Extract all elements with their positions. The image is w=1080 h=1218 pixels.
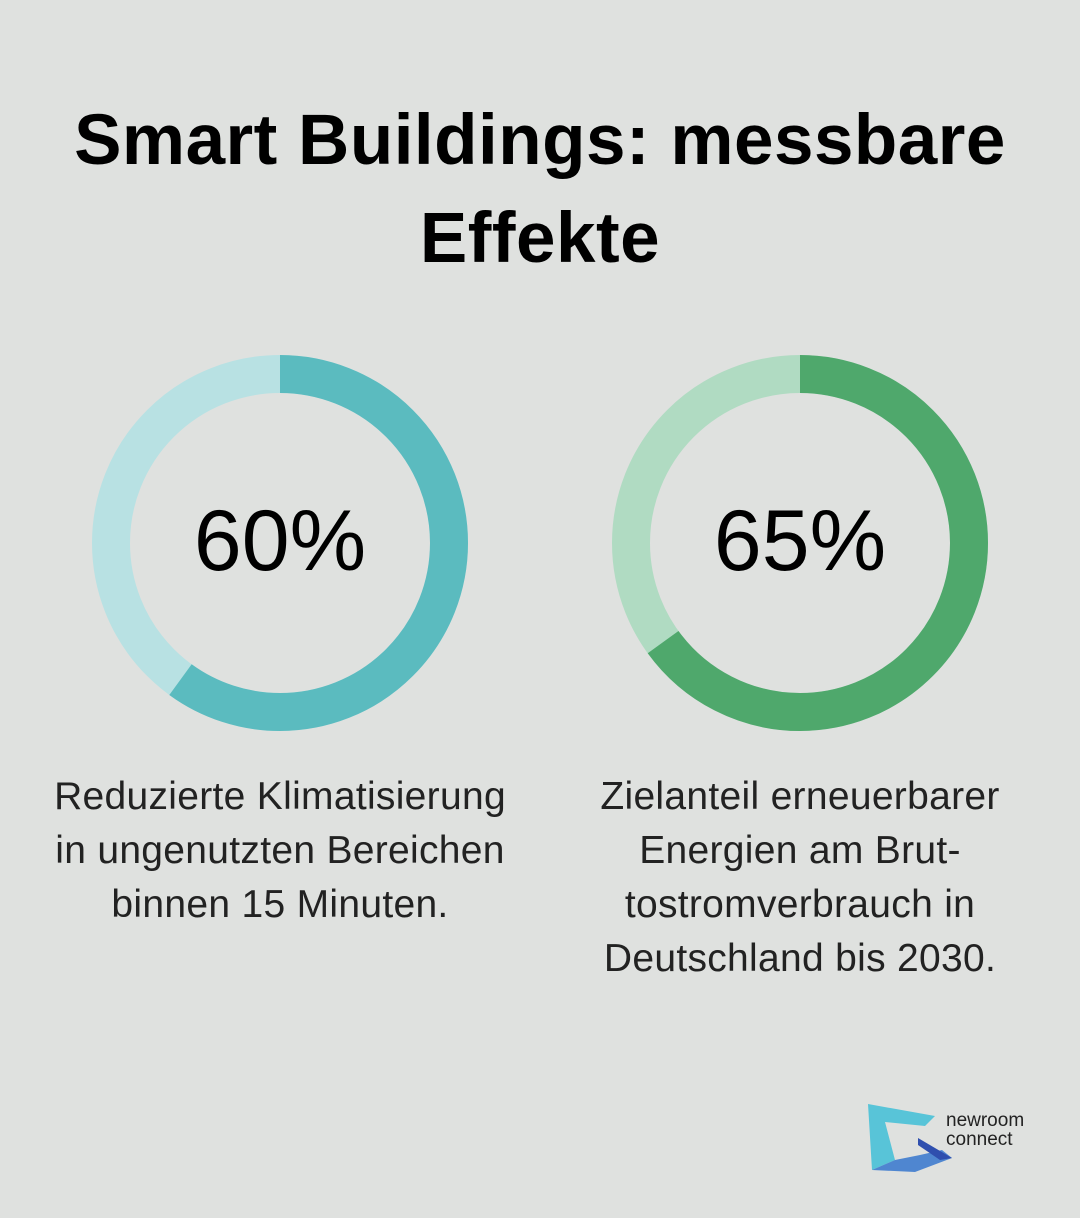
donut 1 [111,374,449,712]
title: Effekte [420,199,660,278]
caption 2: Deutschland bis 2030. [604,937,996,980]
title: Smart Buildings: messbare [74,101,1006,180]
logo: connect [946,1129,1013,1150]
caption 1: Reduzierte Klimatisierung [54,775,506,818]
caption 1: in ungenutzten Bereichen [55,829,505,872]
logo [868,1104,1024,1172]
donut 1: 60% [194,493,366,589]
donut 2 [631,374,969,712]
caption 2: Energien am Brut- [639,829,961,872]
caption 1 [54,775,506,926]
caption 2: Zielanteil erneuerbarer [600,775,1000,818]
caption 2 [600,775,1000,980]
title [74,101,1006,278]
caption 1: binnen 15 Minuten. [111,883,449,926]
donut 2: 65% [714,493,886,589]
caption 2: tostromverbrauch in [625,883,975,926]
logo: newroom [946,1110,1024,1131]
